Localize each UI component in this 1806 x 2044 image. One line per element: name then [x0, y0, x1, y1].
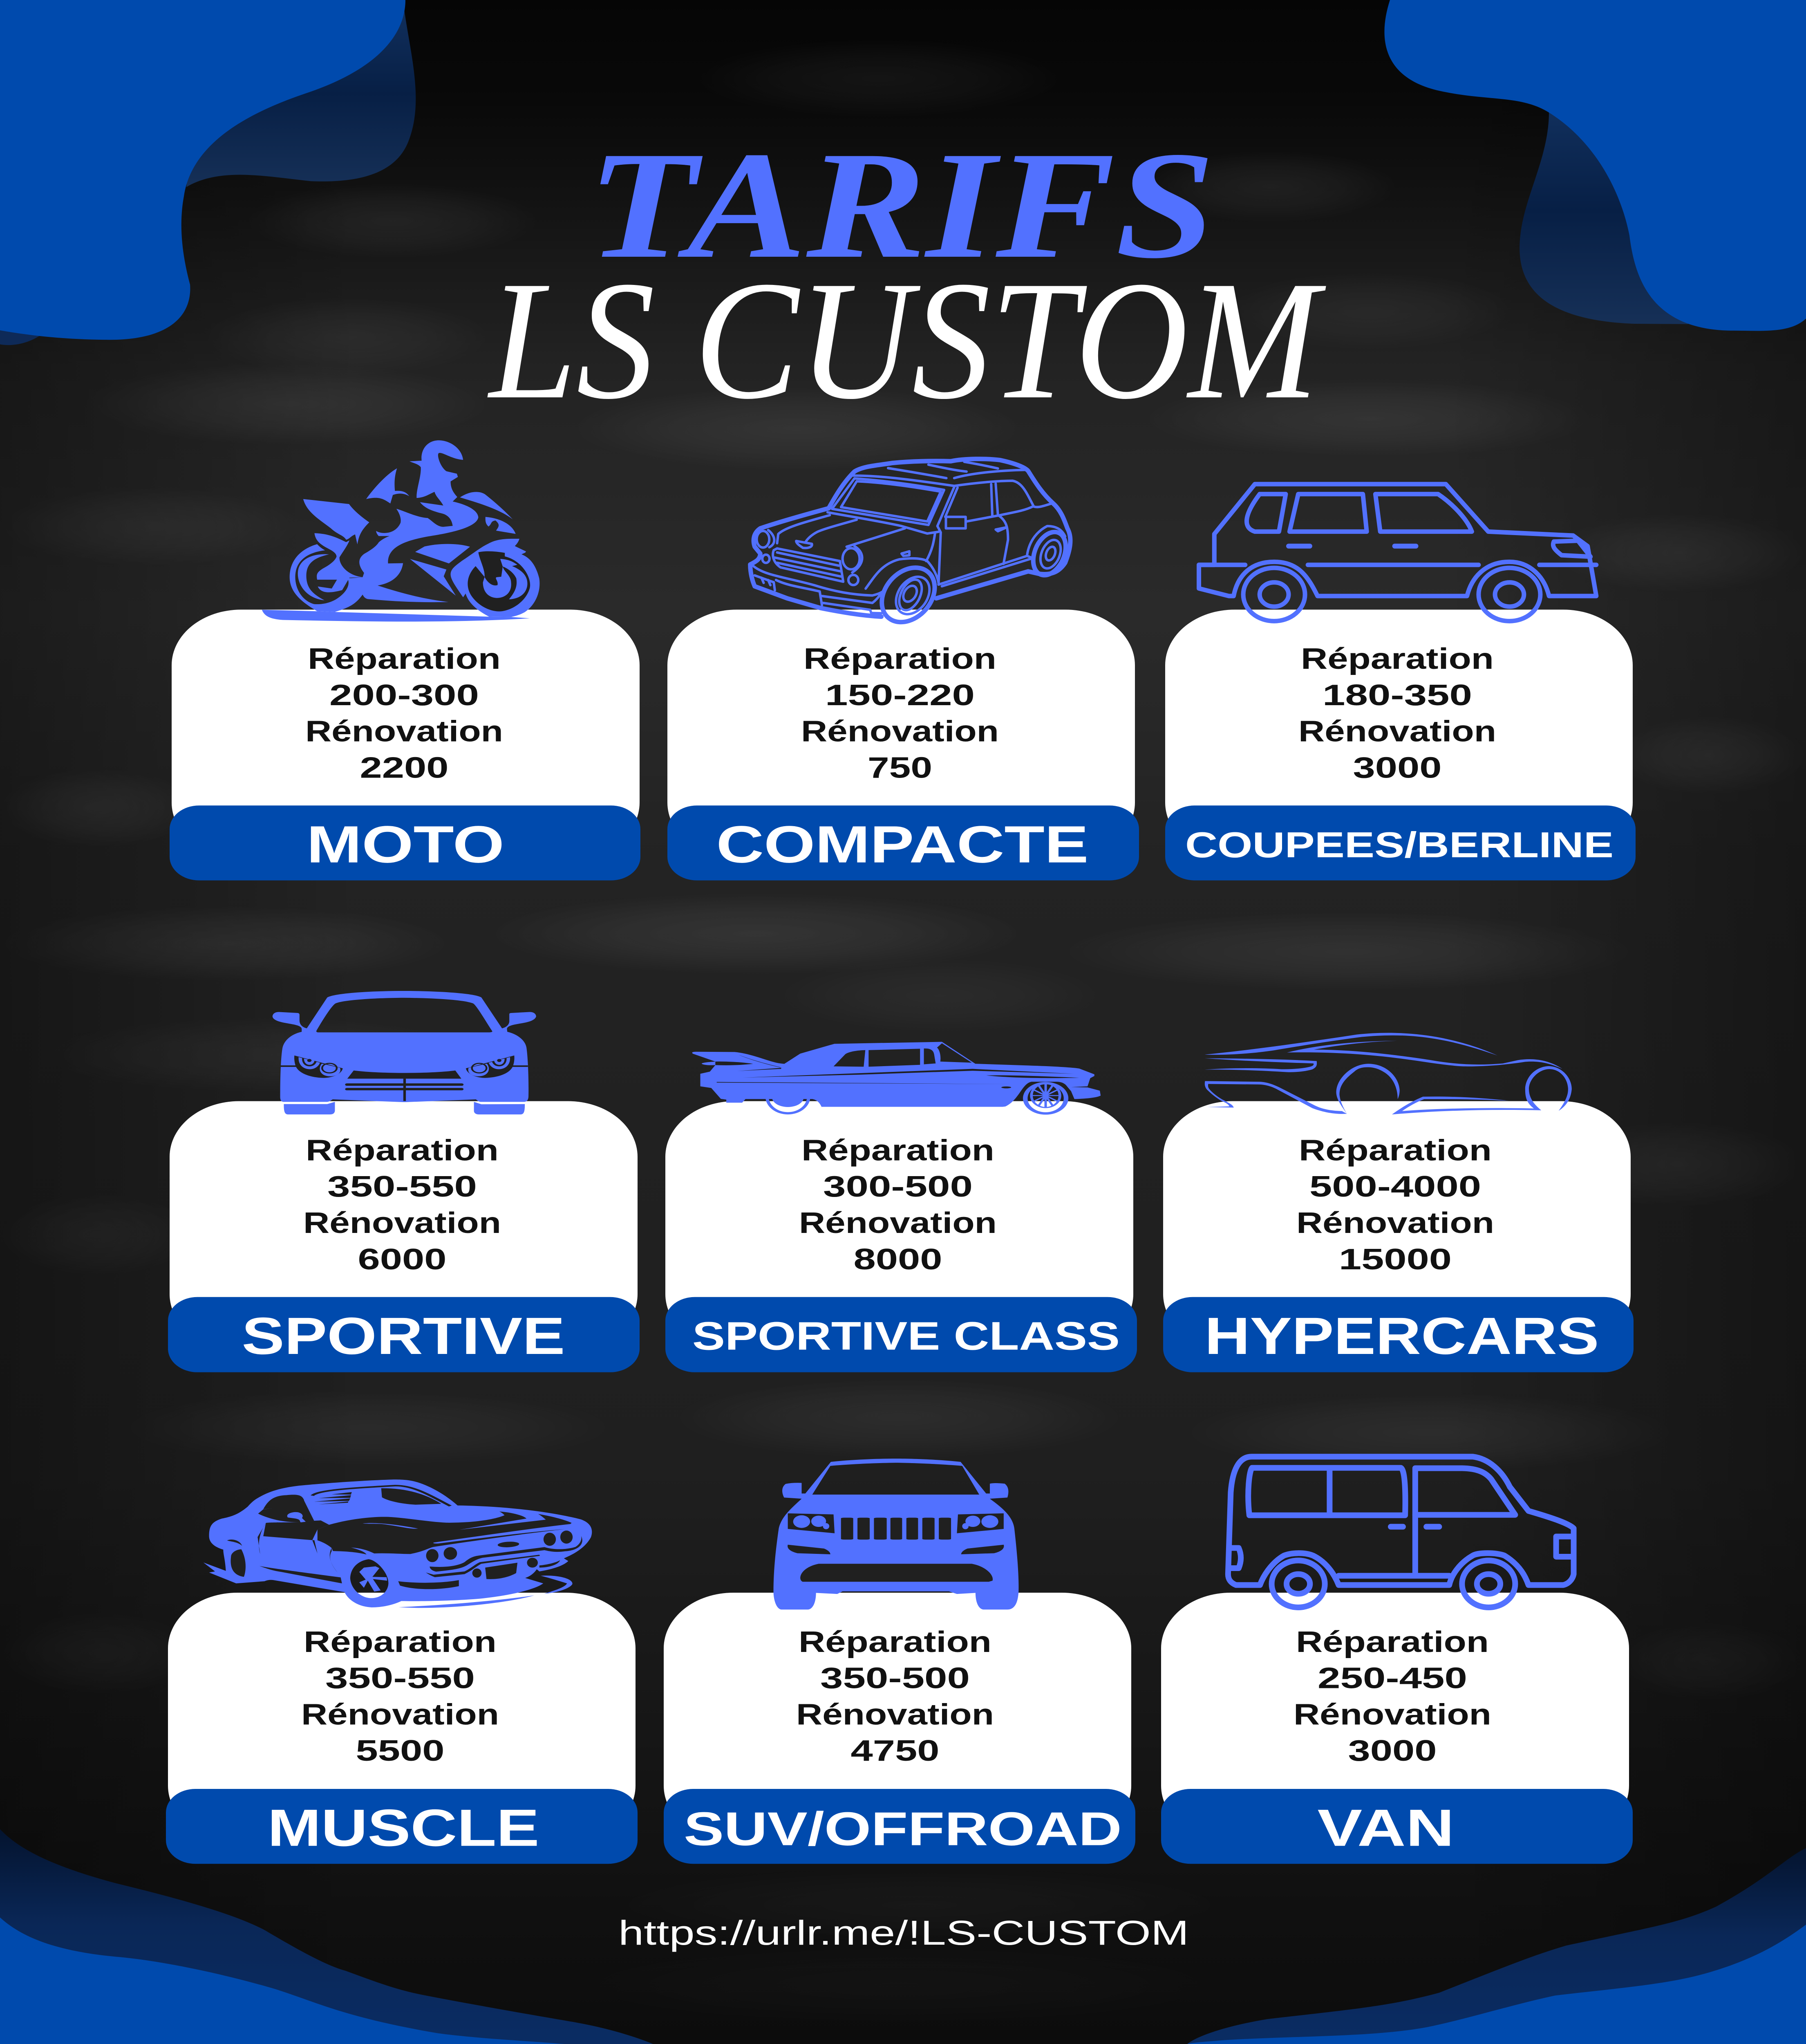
price text: 3000 [1353, 751, 1442, 784]
title: TARIFS: TARIFS [587, 120, 1215, 290]
label bar [664, 1789, 1135, 1864]
price text: 500-4000 [1309, 1170, 1481, 1203]
label bar: SPORTIVE [242, 1307, 565, 1365]
price text: Réparation [799, 1625, 991, 1659]
label bar [1161, 1789, 1633, 1864]
price text: Rénovation [303, 1207, 501, 1239]
price text [301, 1625, 499, 1767]
panel: coupees / berline [1165, 484, 1636, 881]
panel: sportive class [665, 1042, 1137, 1372]
card body [1163, 1101, 1631, 1350]
price text: Réparation [308, 643, 501, 675]
icon: compact car [750, 459, 1070, 624]
label bar: HYPERCARS [1205, 1307, 1599, 1365]
price text: 750 [868, 751, 932, 784]
label bar: MOTO [307, 815, 504, 874]
price text: Réparation [803, 643, 996, 675]
card body [170, 1101, 638, 1350]
panel: muscle [166, 1479, 638, 1864]
price text: Réparation [1301, 643, 1494, 675]
price text: 15000 [1339, 1243, 1452, 1276]
price text [796, 1625, 994, 1767]
icon: hypercar outline [1204, 1033, 1572, 1114]
price text: 3000 [1348, 1735, 1437, 1767]
price text [305, 643, 503, 784]
label bar: SPORTIVE CLASS [692, 1314, 1120, 1358]
footer link: https://urlr.me/!LS-CUSTOM [618, 1914, 1189, 1952]
price text: 350-550 [327, 1170, 477, 1203]
price text: 180-350 [1323, 679, 1472, 712]
price text: 350-500 [820, 1662, 970, 1695]
price text: Réparation [304, 1625, 497, 1659]
panel: compacte [667, 459, 1139, 881]
card body [172, 610, 640, 858]
card body [667, 610, 1135, 858]
card body [665, 1101, 1133, 1350]
icon: motorcycle [262, 440, 539, 621]
price text: Rénovation [1294, 1698, 1491, 1731]
label bar: COMPACTE [716, 815, 1088, 874]
label bar: MUSCLE [267, 1798, 539, 1857]
price text: 8000 [854, 1243, 942, 1276]
price text: 350-550 [325, 1662, 475, 1695]
decorative blob: top right [1384, 0, 1806, 331]
price text: 5500 [356, 1735, 445, 1767]
price text: Rénovation [1298, 715, 1496, 748]
icon: classic car [692, 1042, 1101, 1115]
price text [1298, 643, 1496, 784]
label bar: COUPEES/BERLINE [1185, 825, 1614, 865]
label bar [168, 1297, 640, 1372]
icon: muscle car [204, 1479, 592, 1608]
label bar [667, 805, 1139, 881]
card body [664, 1593, 1131, 1841]
price text [1294, 1625, 1491, 1767]
panel: suv / offroad [664, 1459, 1135, 1864]
label bar [665, 1297, 1137, 1372]
icon: suv front [774, 1459, 1018, 1609]
label bar [166, 1789, 638, 1864]
price text [303, 1134, 501, 1276]
price text [799, 1134, 997, 1276]
price text: Réparation [1299, 1134, 1492, 1167]
price text: 6000 [358, 1243, 447, 1276]
price text: Rénovation [301, 1698, 499, 1731]
price text: Rénovation [796, 1698, 994, 1731]
price text [1296, 1134, 1494, 1276]
card body [1165, 610, 1633, 858]
price text: 300-500 [823, 1170, 973, 1203]
price text: Rénovation [305, 715, 503, 748]
panel: van [1161, 1457, 1633, 1864]
price text: Réparation [1296, 1625, 1489, 1659]
icon: sedan [1199, 484, 1596, 621]
card body [1161, 1593, 1629, 1841]
card body [168, 1593, 636, 1841]
panel: moto [170, 440, 640, 881]
label bar [170, 805, 640, 881]
price text: 150-220 [825, 679, 975, 712]
price text: 200-300 [329, 679, 479, 712]
title: LS CUSTOM: LS CUSTOM [487, 246, 1328, 434]
icon: sports car front [273, 991, 536, 1114]
decorative blob: top left [0, 0, 416, 345]
price text [801, 643, 999, 784]
icon: van [1228, 1457, 1574, 1607]
price text: Rénovation [799, 1207, 997, 1239]
price text: Rénovation [1296, 1207, 1494, 1239]
price text: 2200 [360, 751, 449, 784]
decorative blob: bottom left [0, 1829, 653, 2044]
label bar [1165, 805, 1636, 881]
price text: Réparation [801, 1134, 994, 1167]
label bar: SUV/OFFROAD [684, 1802, 1122, 1855]
price text: 4750 [851, 1735, 940, 1767]
price text: 250-450 [1318, 1662, 1467, 1695]
decorative blob: bottom right [1187, 1848, 1806, 2044]
price text: Réparation [306, 1134, 499, 1167]
price text: Rénovation [801, 715, 999, 748]
panel: sportive [168, 991, 640, 1372]
label bar: VAN [1318, 1798, 1455, 1857]
panel: hypercars [1163, 1033, 1634, 1372]
label bar [1163, 1297, 1634, 1372]
